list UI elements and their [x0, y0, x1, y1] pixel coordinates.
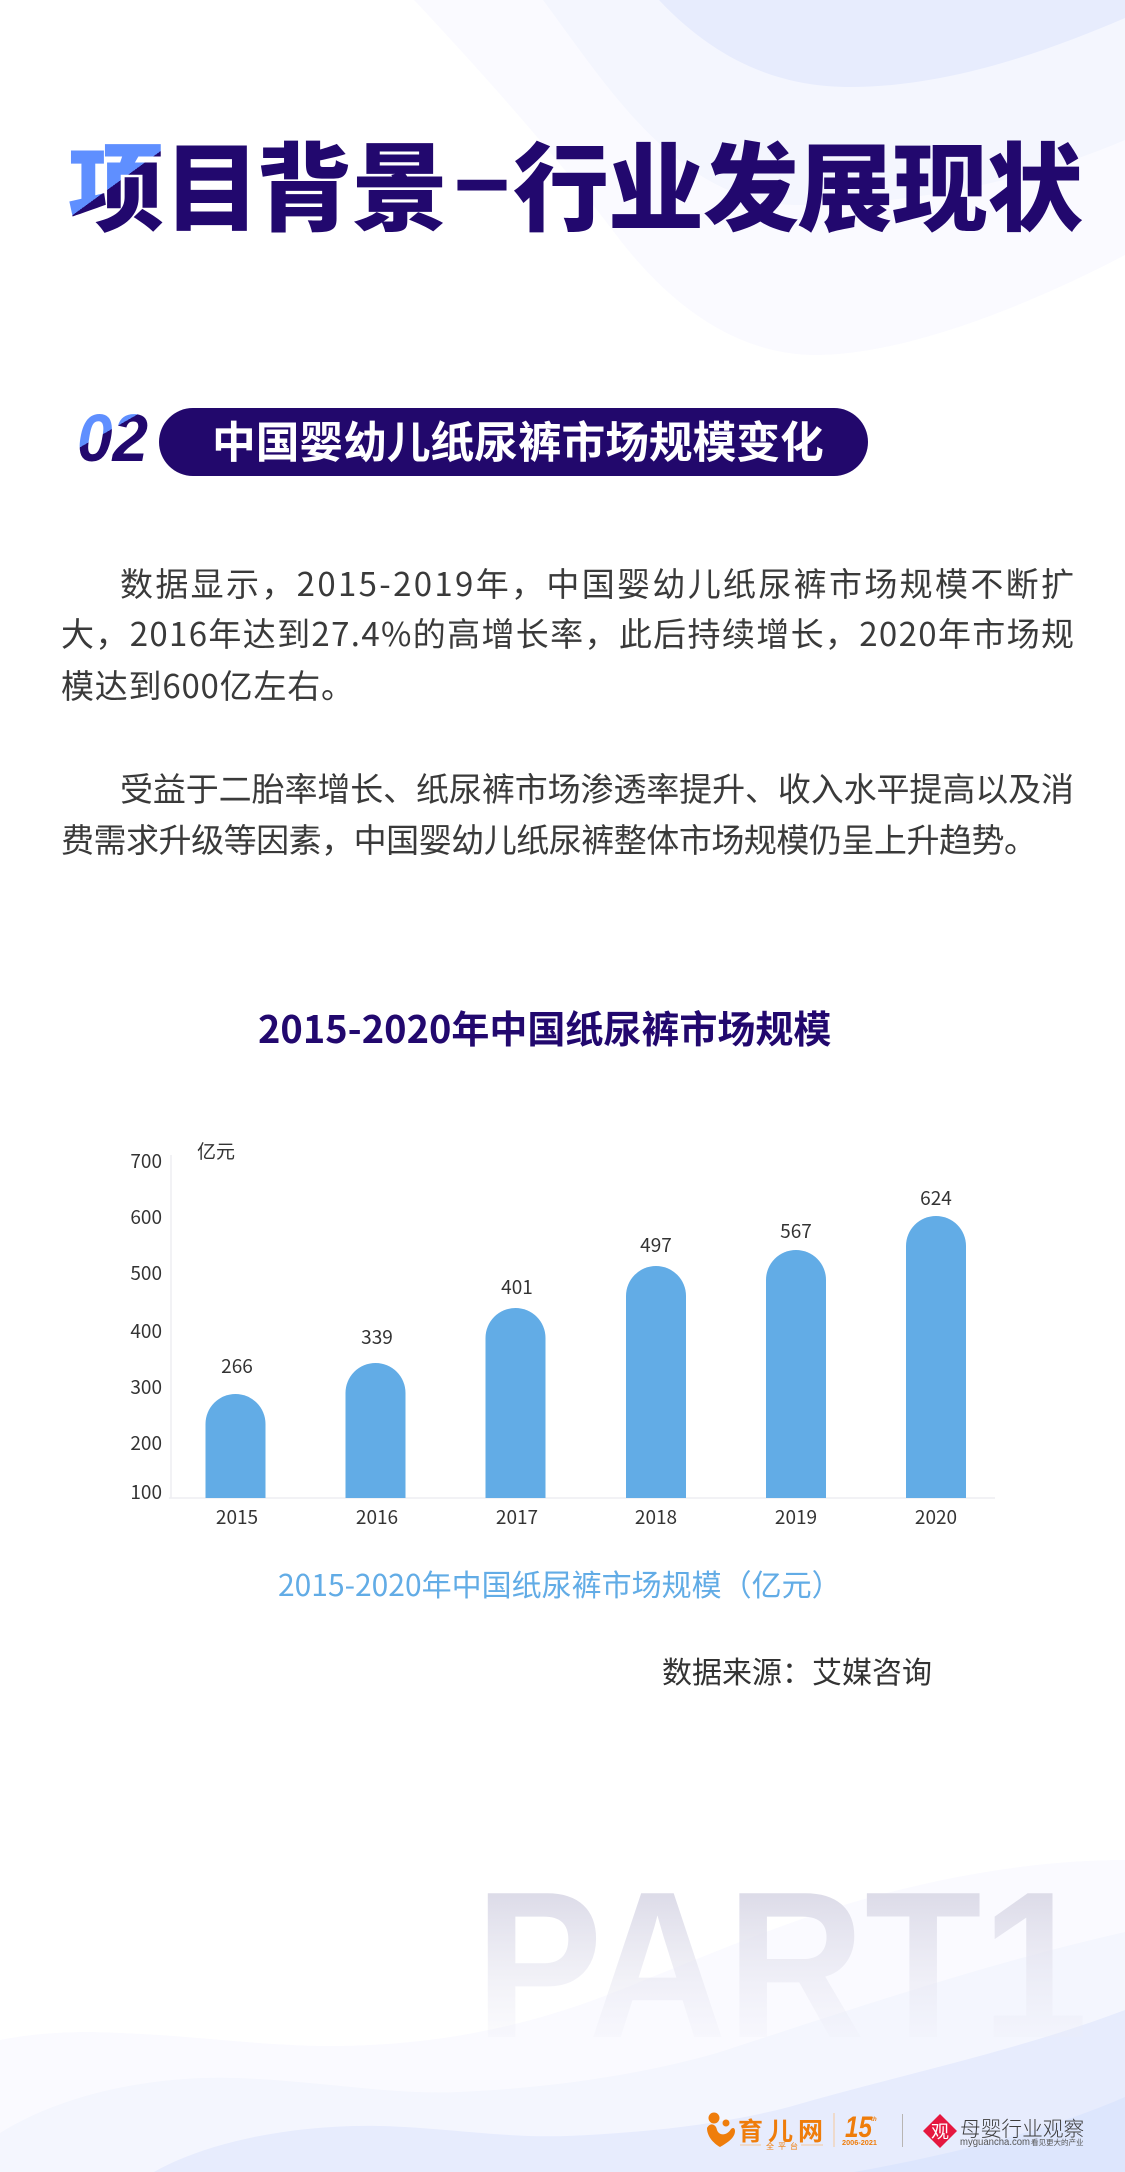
watermark: PART1: PART1	[475, 1849, 1088, 2082]
icon: red diamond: 观	[931, 2118, 949, 2144]
paragraph 2	[61, 763, 1074, 862]
value labels: 266	[221, 1352, 253, 1379]
title	[68, 102, 1083, 251]
chart caption: 2015-2020年中国纸尿裤市场规模（亿元）	[278, 1561, 842, 1605]
y axis labels: 100	[130, 1478, 162, 1505]
y axis labels: 300	[130, 1373, 162, 1400]
bar chart	[130, 1137, 995, 1530]
value labels	[221, 1184, 952, 1379]
background: bottom waves	[0, 1860, 1125, 2172]
paragraph 1: 模达到600亿左右。	[61, 660, 354, 708]
logo divider	[902, 2114, 904, 2147]
x axis labels: 2018	[635, 1503, 677, 1530]
title: 项	[68, 112, 164, 251]
x axis labels: 2020	[915, 1503, 957, 1530]
x axis labels: 2015	[216, 1503, 258, 1530]
x axis labels: 2019	[775, 1503, 817, 1530]
x axis labels: 2016	[356, 1503, 398, 1530]
icon: heart	[707, 2112, 735, 2147]
axes	[169, 1155, 995, 1498]
divider	[833, 2113, 835, 2147]
title: 行业发展现状	[513, 112, 1083, 251]
brand name: 母婴行业观察	[960, 2112, 1084, 2142]
15th badge: 15	[845, 2111, 873, 2144]
y axis labels: 400	[130, 1317, 162, 1344]
y axis labels: 500	[130, 1259, 162, 1286]
15th badge: 2006-2021	[842, 2140, 877, 2147]
y axis labels: 200	[130, 1429, 162, 1456]
value labels: 401	[501, 1273, 533, 1300]
section heading pill: 中国婴幼儿纸尿裤市场规模变化	[212, 407, 824, 471]
value labels: 339	[361, 1323, 393, 1350]
paragraph 2: 受益于二胎率增长、纸尿裤市场渗透率提升、收入水平提高以及消	[120, 763, 1074, 811]
brand name: 育儿网	[738, 2112, 828, 2148]
bars	[206, 1216, 966, 1498]
icon: red diamond	[923, 2114, 957, 2148]
section number: 02	[77, 401, 148, 476]
data source: 数据来源：艾媒咨询	[662, 1648, 932, 1692]
y axis labels	[130, 1147, 162, 1505]
x axis labels	[216, 1503, 957, 1530]
url: myguancha.com	[960, 2137, 1030, 2148]
slogan: 看见更大的产业	[1031, 2137, 1084, 2148]
value labels: 624	[920, 1184, 952, 1211]
title: –	[452, 102, 512, 241]
tagline	[740, 2141, 823, 2152]
logo: 母婴行业观察	[923, 2112, 1084, 2148]
y axis labels: 700	[130, 1147, 162, 1174]
background: top waves	[414, 0, 1125, 355]
unit label: 亿元	[197, 1137, 235, 1164]
x axis labels: 2017	[496, 1503, 538, 1530]
chart title: 2015-2020年中国纸尿裤市场规模	[258, 999, 831, 1054]
value labels: 567	[780, 1217, 812, 1244]
tagline: 全平台	[766, 2141, 802, 2152]
paragraph 2: 费需求升级等因素，中国婴幼儿纸尿裤整体市场规模仍呈上升趋势。	[61, 814, 1037, 862]
15th badge: th	[871, 2117, 877, 2123]
title: 目背景	[164, 112, 448, 251]
paragraph 1: 大，2016年达到27.4%的高增长率，此后持续增长，2020年市场规	[61, 608, 1074, 656]
y axis labels: 600	[130, 1203, 162, 1230]
paragraph 1: 数据显示，2015-2019年，中国婴幼儿纸尿裤市场规模不断扩	[120, 558, 1074, 606]
value labels: 497	[640, 1231, 672, 1258]
paragraph 1	[61, 558, 1074, 708]
logo: 育儿网	[707, 2111, 877, 2152]
